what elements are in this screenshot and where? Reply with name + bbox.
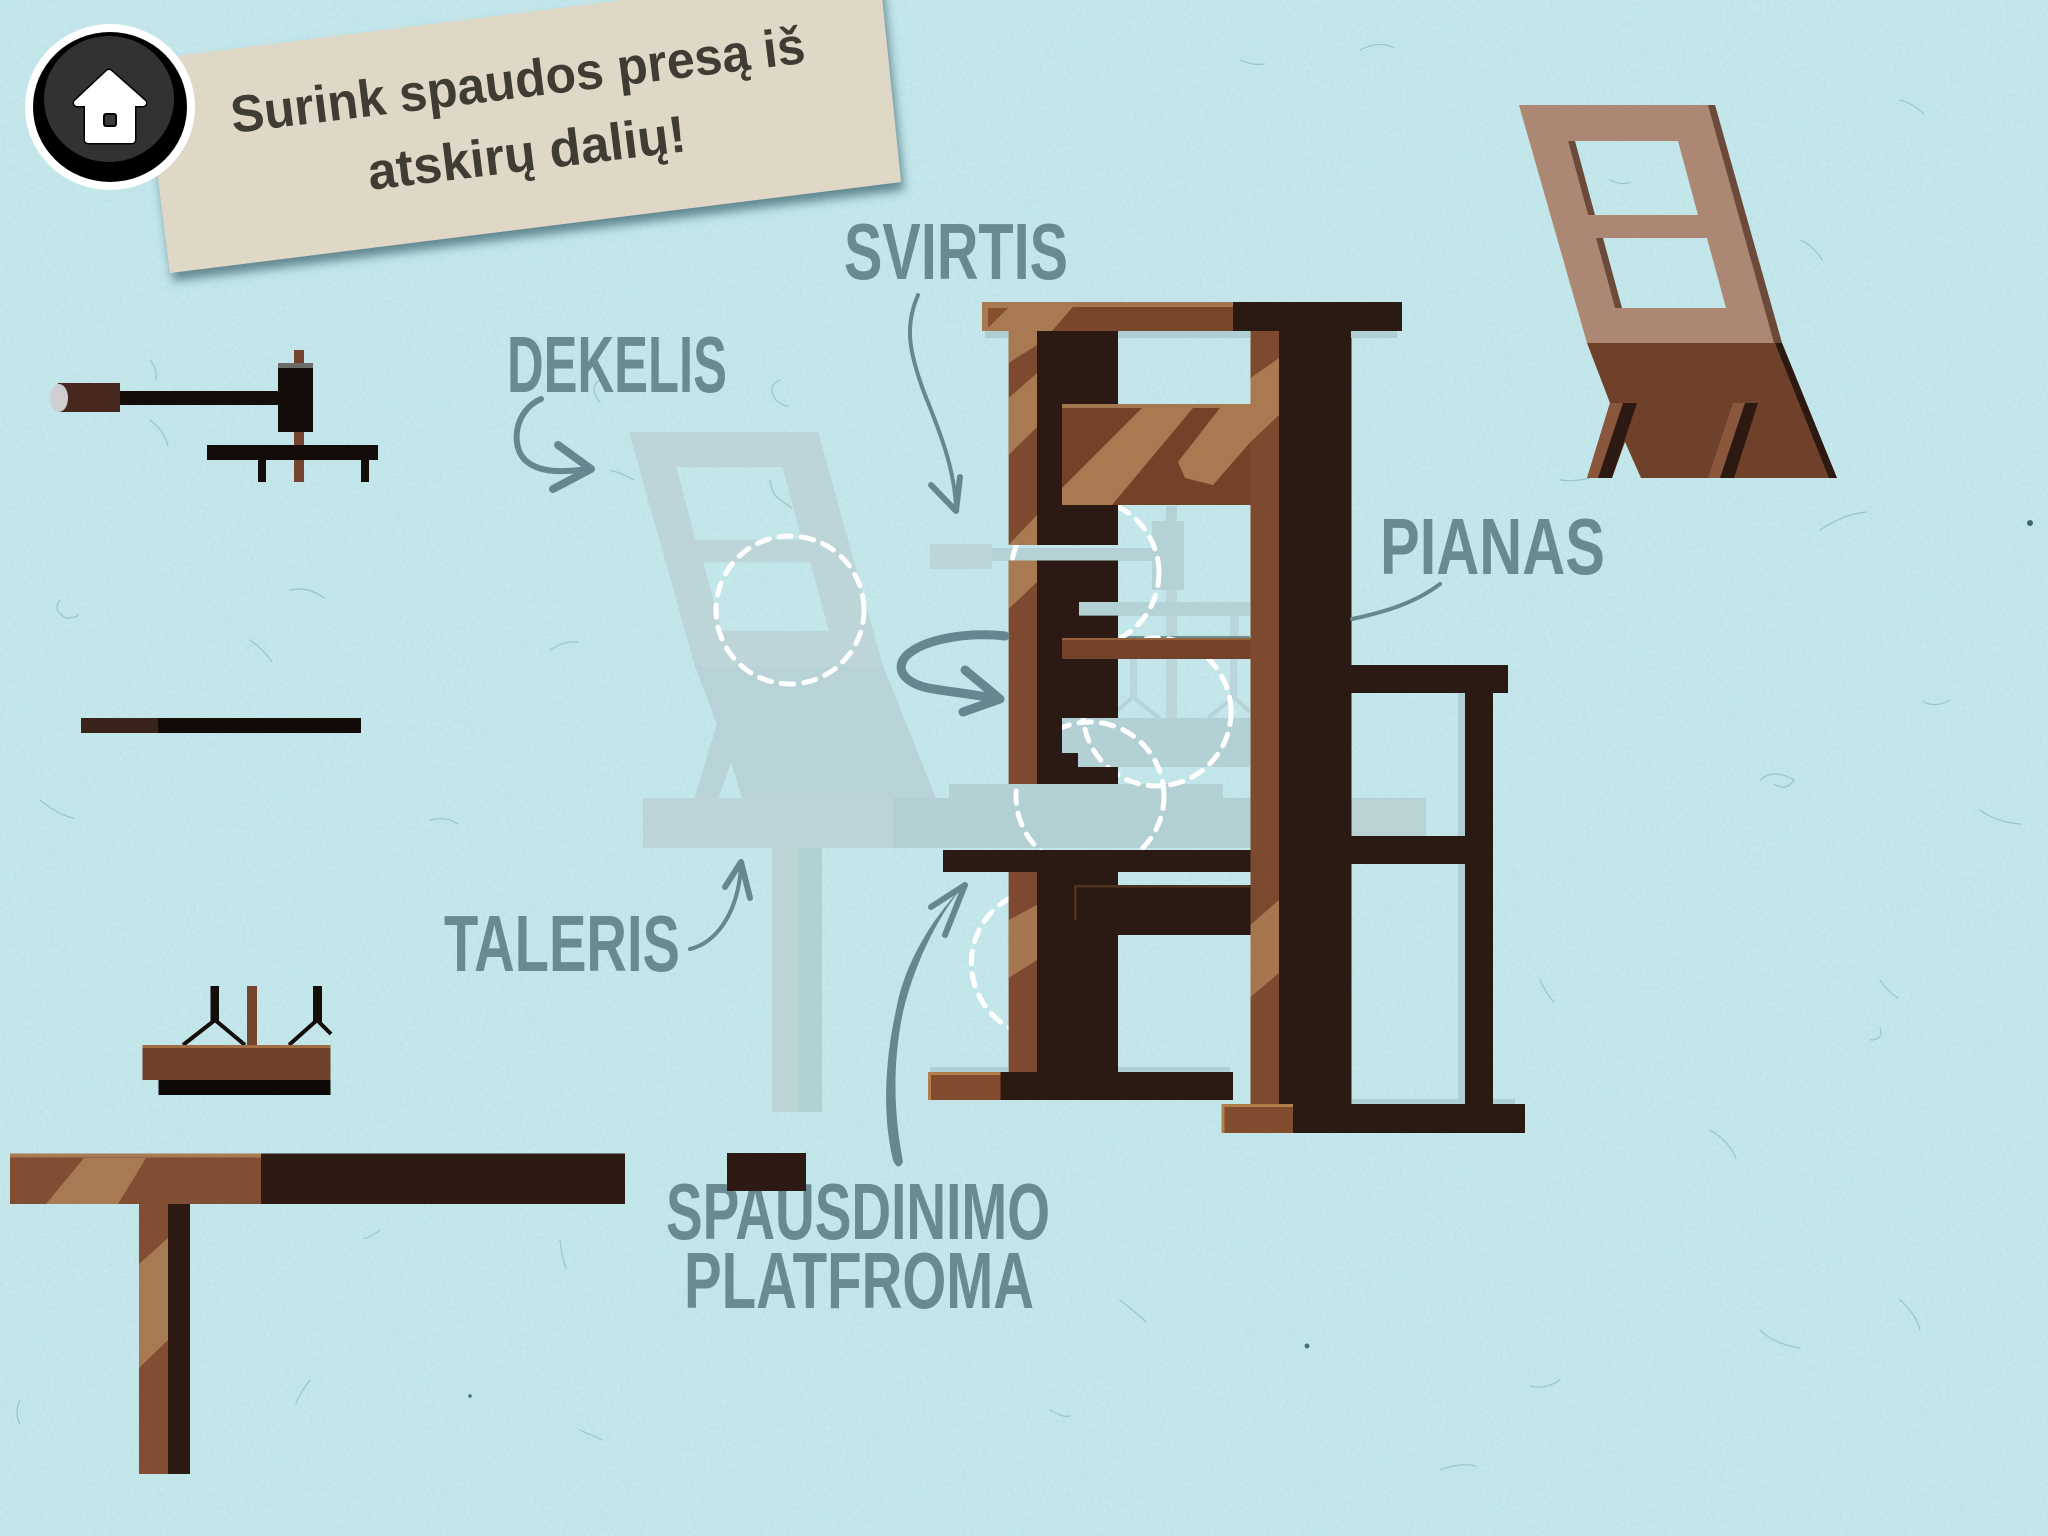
arrow: dekelis to cover — [517, 399, 591, 489]
note text — [227, 17, 808, 202]
right base foot — [1222, 1104, 1525, 1133]
label: SVIRTIS: SVIRTIS — [844, 207, 1068, 296]
ghost: table outline (taleris) — [643, 798, 1426, 1112]
back frame rails — [1351, 665, 1508, 1104]
arrow: taleris to table — [690, 862, 750, 949]
label: TALERIS: TALERIS — [444, 899, 680, 988]
right column wood — [1250, 331, 1279, 1105]
label: SPAUSDINIMO PLATFROMA — [666, 1167, 1050, 1325]
part: long bar — [81, 718, 361, 733]
dashed target circles — [716, 499, 1231, 1028]
arrow: pianas to frame — [1352, 584, 1440, 619]
frame soft shadows — [930, 331, 1515, 1104]
screw brace — [1062, 404, 1250, 505]
arrow: svirtis to lever — [910, 295, 960, 511]
printing platform — [943, 850, 1250, 935]
note text: Surink spaudos presą iš — [227, 17, 808, 145]
press frame: assembled wooden parts — [928, 302, 1525, 1133]
icon: home button — [25, 24, 195, 190]
left base foot — [928, 1072, 1233, 1100]
part: small dark block — [727, 1153, 806, 1191]
part: lever with screw, top left — [50, 350, 378, 482]
title note — [143, 0, 901, 273]
left column dark — [1037, 331, 1118, 1072]
part: cover (dekelis) top right — [1519, 105, 1837, 478]
part: table — [10, 1154, 625, 1474]
note paper — [143, 0, 901, 273]
press shelf — [1062, 638, 1250, 659]
label: SPAUSDINIMO PLATFROMA: PLATFROMA — [684, 1236, 1034, 1325]
arrow: platform pointer — [886, 884, 965, 1167]
right column dark — [1279, 331, 1352, 1133]
ghost: lever and crossbars — [930, 506, 1250, 722]
label: PIANAS: PIANAS — [1380, 502, 1605, 591]
part: platen with hangers — [142, 986, 331, 1095]
note text: atskirų dalių! — [364, 105, 689, 202]
ghost: press bed and platen — [949, 718, 1250, 799]
arrow: curved rotate arrow — [901, 635, 1005, 712]
left column wood — [1009, 331, 1037, 1072]
label: DEKELIS: DEKELIS — [507, 320, 727, 409]
ghost: press cover outline (dekelis) — [629, 432, 936, 814]
label: SPAUSDINIMO PLATFROMA: SPAUSDINIMO — [666, 1167, 1050, 1256]
top beam — [982, 302, 1402, 331]
